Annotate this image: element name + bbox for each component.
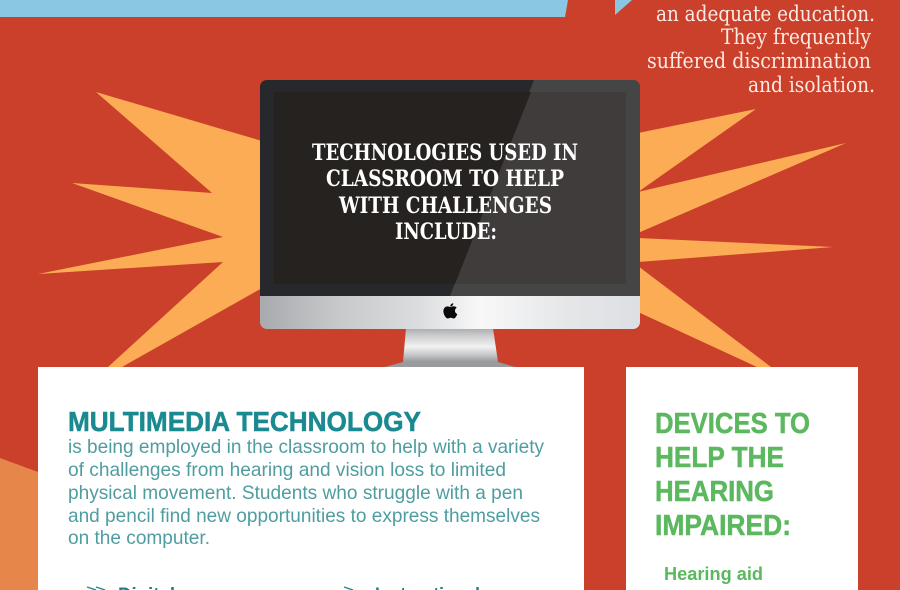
screen glare <box>455 92 626 284</box>
monitor bezel <box>260 80 640 296</box>
monitor heading: TECHNOLOGIES USED IN <box>312 140 578 166</box>
text block: top right quote: They frequently <box>721 25 871 49</box>
panel body text: of challenges from hearing and vision loss to limited <box>68 459 506 481</box>
panel heading: HELP THE <box>655 442 784 474</box>
list item: hearing aid: Hearing aid <box>664 564 763 584</box>
screen <box>274 92 626 284</box>
panel body text: is being employed in the classroom to help with a variety <box>68 436 544 458</box>
monitor heading: CLASSROOM TO HELP <box>326 166 564 192</box>
blue speech bubble tail <box>615 0 632 15</box>
panel heading <box>655 408 810 542</box>
list item: digital <box>87 585 175 590</box>
panel body text <box>68 436 544 549</box>
top blue banner <box>0 0 568 17</box>
text block: top right quote <box>647 2 875 97</box>
panel heading: MULTIMEDIA TECHNOLOGY <box>68 406 421 437</box>
orange corner shape <box>0 458 38 590</box>
panel: multimedia technology <box>38 367 584 590</box>
panel body text: on the computer. <box>68 527 210 549</box>
right starburst <box>638 109 846 367</box>
text block: top right quote: suffered discrimination <box>647 49 871 73</box>
text block: top right quote: and isolation. <box>748 73 875 97</box>
icon: apple logo <box>443 303 457 318</box>
text block: top right quote: an adequate education. <box>656 2 875 26</box>
left starburst <box>38 92 262 367</box>
monitor stand <box>385 328 515 367</box>
monitor <box>260 80 640 367</box>
monitor heading: INCLUDE: <box>395 219 497 245</box>
panel body text: and pencil find new opportunities to express themselves <box>68 505 540 527</box>
panel: devices for the hearing impaired <box>626 367 858 590</box>
bezel glare <box>450 80 640 296</box>
panel heading: IMPAIRED: <box>655 510 791 542</box>
panel body text: physical movement. Students who struggle with a pen <box>68 482 523 504</box>
monitor chin <box>260 290 640 329</box>
panel heading: DEVICES TO <box>655 408 810 440</box>
monitor heading <box>312 140 578 245</box>
monitor heading: WITH CHALLENGES <box>338 193 552 219</box>
panel heading: HEARING <box>655 476 774 508</box>
